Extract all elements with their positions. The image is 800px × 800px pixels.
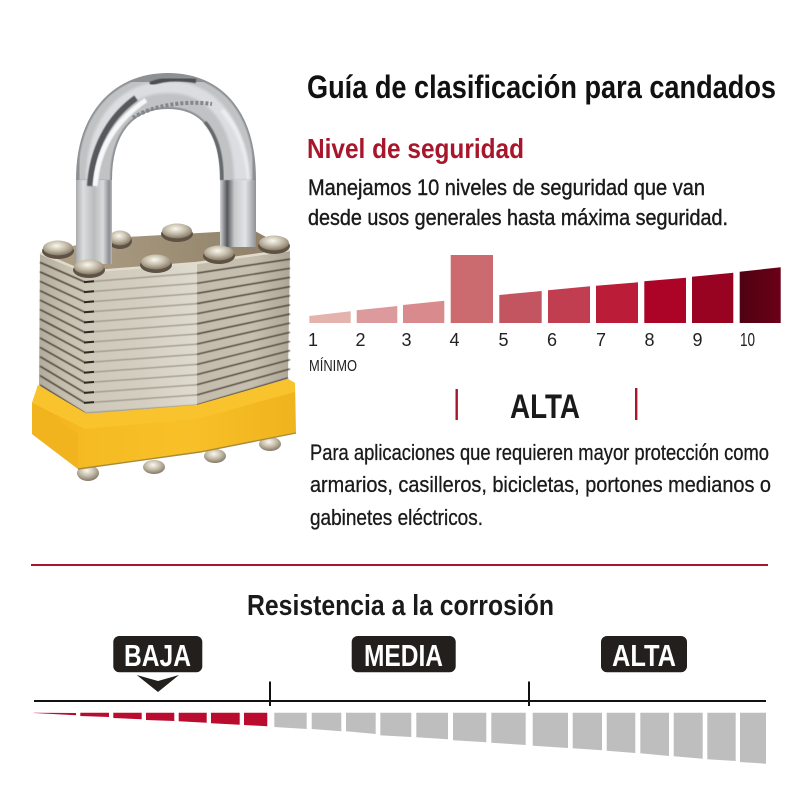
corrosion scale: low segments (34, 713, 267, 726)
scale numbers: 6 (547, 330, 557, 350)
scale numbers: 3 (402, 330, 412, 350)
padlock photo illustration (32, 79, 296, 481)
corrosion axis (34, 682, 766, 706)
label: minimo: MÍNIMO (309, 356, 357, 375)
heading: resistencia a la corrosion: Resistencia a la corrosión (247, 590, 554, 622)
back rivets (42, 224, 290, 259)
yellow bumper (32, 379, 296, 469)
intro text: Manejamos 10 niveles de seguridad que van (308, 175, 705, 200)
bottom rivets (77, 437, 281, 481)
scale numbers: 2 (356, 330, 366, 350)
scale numbers: 9 (692, 330, 703, 350)
scale numbers: 4 (450, 330, 460, 350)
description paragraph: gabinetes eléctricos. (310, 505, 483, 530)
icon: selection arrow (137, 675, 179, 692)
padlock laminated body (39, 230, 290, 414)
scale numbers: 1 (308, 330, 318, 350)
badge: baja: BAJA (124, 638, 191, 673)
heading: nivel de seguridad: Nivel de seguridad (307, 133, 524, 164)
description paragraph (310, 440, 771, 530)
steel shackle (90, 79, 248, 264)
level marker: alta: ALTA (510, 388, 580, 426)
scale numbers: 7 (596, 330, 606, 350)
security level bar chart (309, 255, 781, 323)
scale numbers: 5 (498, 330, 509, 350)
front rivets (73, 246, 235, 278)
badge: alta: ALTA (612, 638, 676, 673)
badge: media: MEDIA (364, 638, 443, 673)
scale numbers (308, 330, 755, 350)
intro text: desde usos generales hasta máxima seguridad. (308, 205, 728, 230)
intro text (308, 175, 728, 230)
scale numbers: 8 (644, 330, 655, 350)
scale numbers: 10 (740, 330, 755, 350)
corrosion scale: remaining segments (274, 713, 766, 764)
